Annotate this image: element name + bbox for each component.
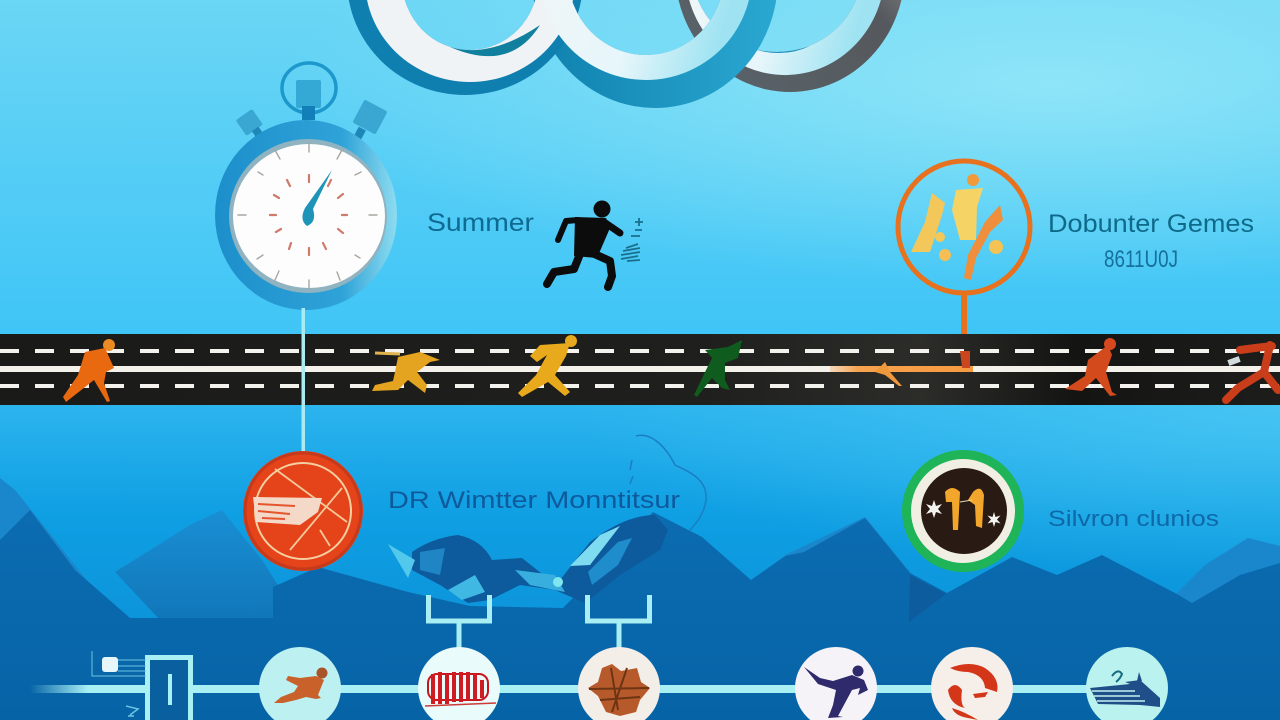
runner: yellow bbox=[518, 335, 577, 397]
ring 3 bbox=[675, 0, 905, 92]
athletes bbox=[911, 174, 1003, 280]
snowflakes bbox=[926, 500, 1000, 527]
overlapping rings bbox=[347, 0, 905, 108]
icon: sprinter bbox=[259, 647, 341, 720]
dial ticks bbox=[238, 142, 377, 289]
icon: red swirl bbox=[931, 647, 1013, 720]
mountains bbox=[0, 478, 1280, 720]
runner: orange bbox=[63, 339, 115, 402]
icon: black runner bbox=[547, 200, 643, 287]
hand bbox=[302, 170, 332, 226]
green badge bbox=[902, 450, 1024, 572]
connector: stopwatch to winter badge bbox=[302, 308, 305, 453]
winter badge bbox=[243, 451, 363, 571]
main ridge bbox=[0, 510, 1280, 720]
icon: red stripes bbox=[418, 647, 500, 720]
label: games: Dobunter Gemes bbox=[1048, 210, 1254, 238]
icon: cruise ship bbox=[1086, 647, 1168, 720]
faint outline sketch bbox=[630, 435, 706, 530]
runner: orange streak bbox=[830, 351, 973, 386]
runner: crouched yellow bbox=[372, 352, 440, 393]
ring 2 crescent bbox=[532, 0, 778, 108]
connector: games badge to road bbox=[961, 293, 967, 335]
orange games badge bbox=[898, 161, 1030, 293]
label: games subtitle: 8611U0J bbox=[1104, 246, 1178, 273]
icon: wooden ball bbox=[578, 647, 660, 720]
label: summer: Summer bbox=[427, 209, 534, 237]
side buttons bbox=[236, 99, 388, 136]
gate bbox=[92, 651, 190, 720]
label: winter: DR Wimtter Monntitsur bbox=[388, 487, 680, 514]
case bbox=[215, 120, 397, 310]
crown ring bbox=[282, 63, 336, 113]
label: green badge: Silvron clunios bbox=[1048, 506, 1219, 531]
distant ridge bbox=[0, 478, 110, 620]
ring 1 bbox=[347, 0, 583, 95]
fork brackets bbox=[428, 595, 490, 650]
runner: green bbox=[694, 340, 742, 397]
runner: red large bbox=[1226, 345, 1278, 400]
shadow wedge bbox=[909, 575, 946, 622]
race track bbox=[0, 334, 1280, 405]
stopwatch bbox=[215, 63, 397, 310]
icon: skater bbox=[795, 647, 877, 720]
runner: red bbox=[1065, 338, 1117, 396]
ring 2 white band bbox=[540, 0, 752, 80]
swimmer bbox=[388, 515, 668, 603]
red inner ticks bbox=[270, 175, 347, 255]
bottom timeline bbox=[30, 595, 1168, 720]
